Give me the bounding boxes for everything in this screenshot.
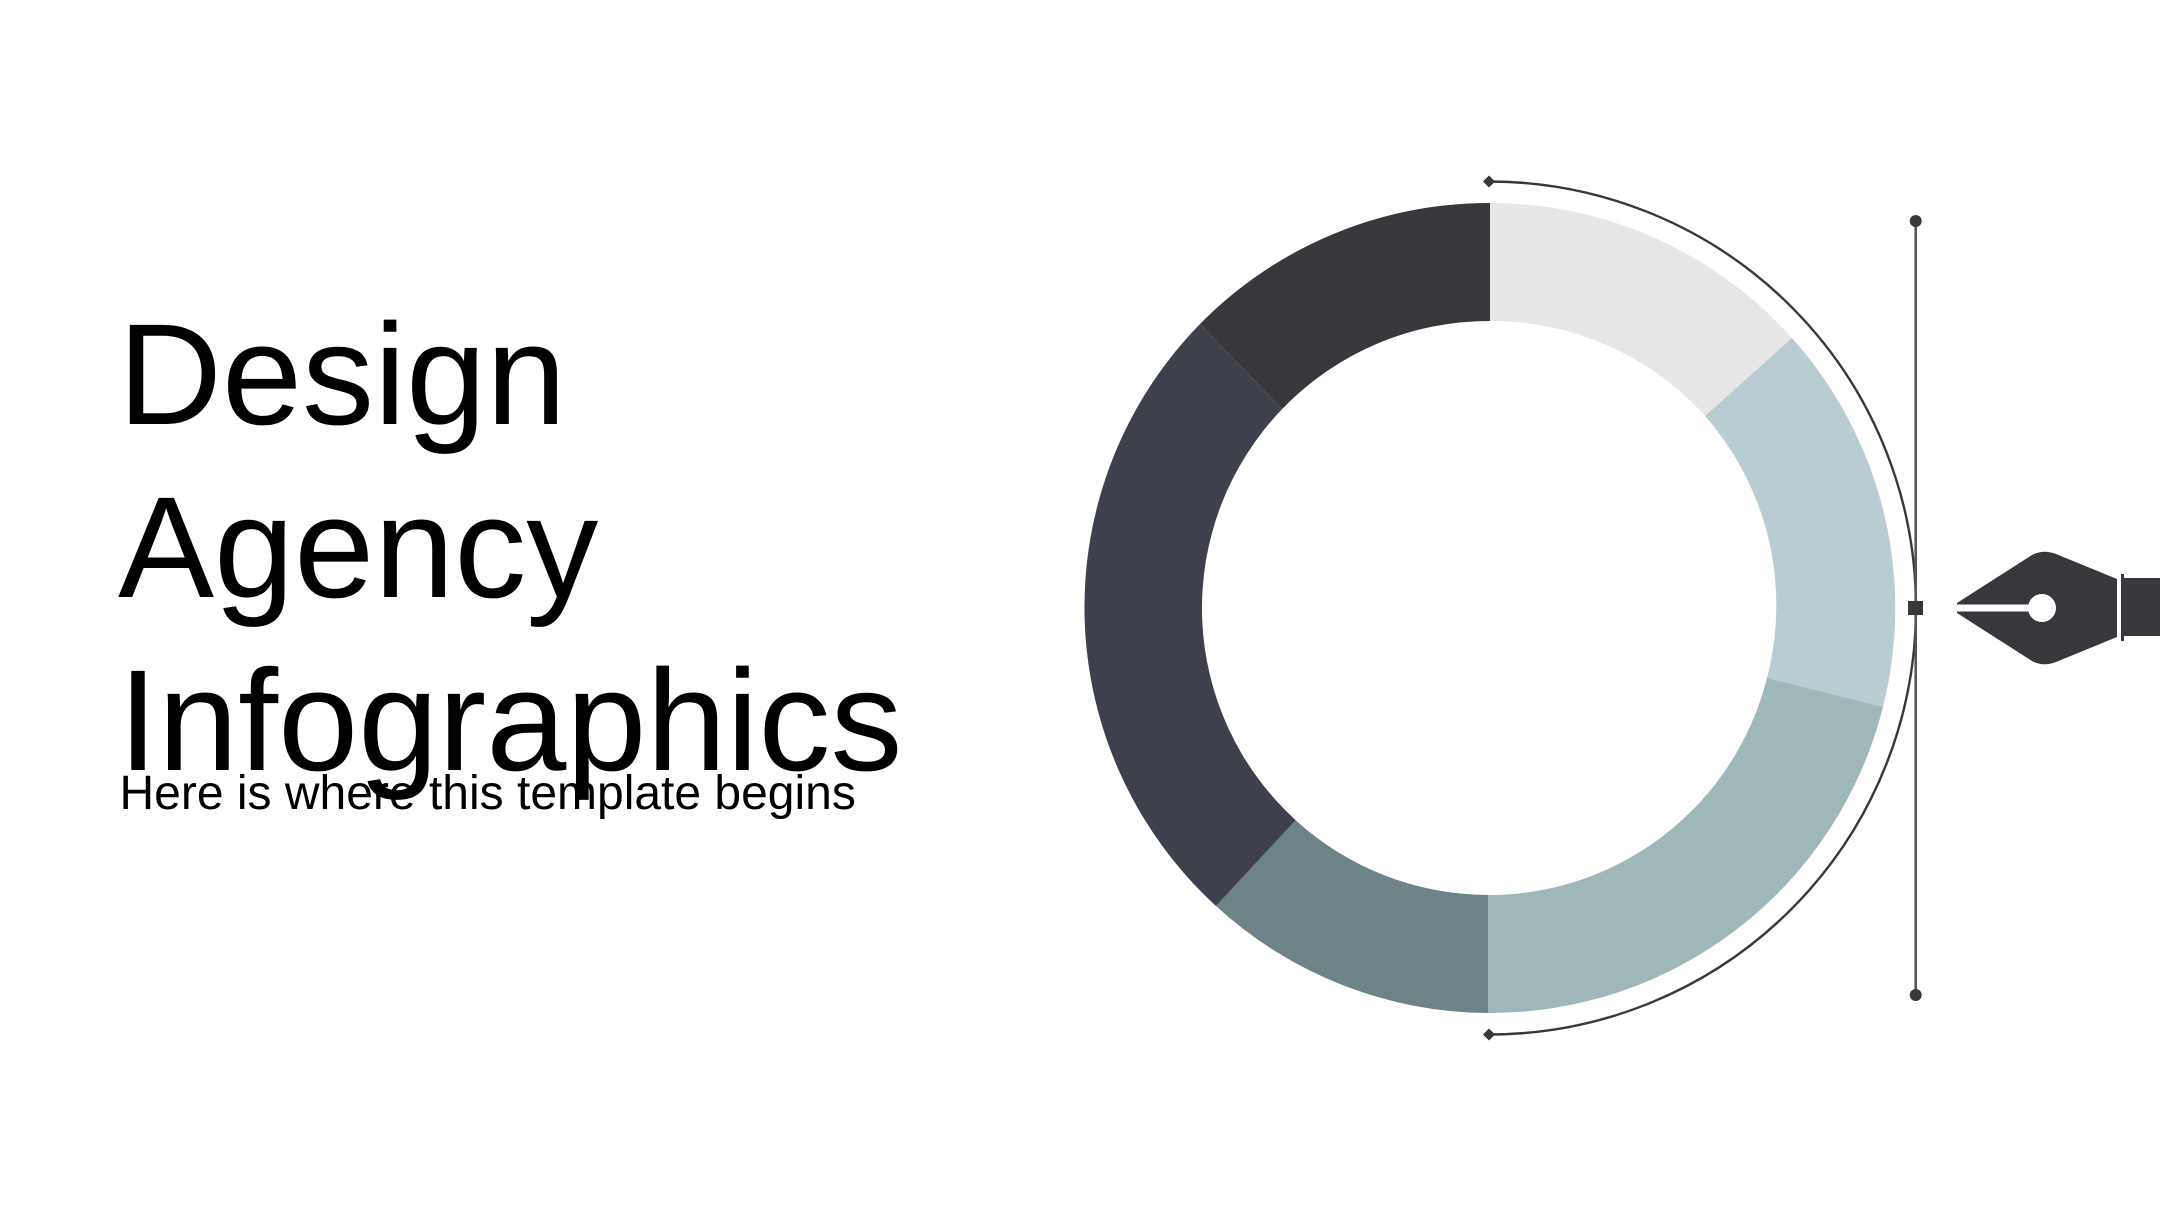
top diamond handle — [1483, 176, 1495, 188]
vertical handle line — [1908, 215, 1923, 1001]
title: Agency — [118, 467, 598, 628]
segment: sea green — [1488, 678, 1883, 1013]
bottom diamond handle — [1483, 1028, 1495, 1040]
top handle dot — [1910, 215, 1922, 227]
title: Infographics — [118, 640, 902, 801]
bottom handle dot — [1910, 989, 1922, 1001]
title — [118, 294, 902, 801]
title: Design — [118, 294, 566, 455]
subtitle: Here is where this template begins — [120, 767, 856, 820]
segment: dark teal — [1216, 820, 1488, 1013]
pen body — [2124, 578, 2160, 636]
donut chart — [1084, 203, 1895, 1013]
centre anchor square — [1908, 601, 1923, 615]
bezier arc guide — [1483, 176, 1916, 1040]
segment: pale blue — [1705, 338, 1895, 707]
nib collar — [2121, 574, 2124, 641]
segment: slate navy — [1084, 324, 1296, 906]
segment: light grey — [1490, 203, 1792, 416]
icon: pen nib — [1957, 552, 2160, 664]
segment: charcoal — [1200, 203, 1490, 409]
